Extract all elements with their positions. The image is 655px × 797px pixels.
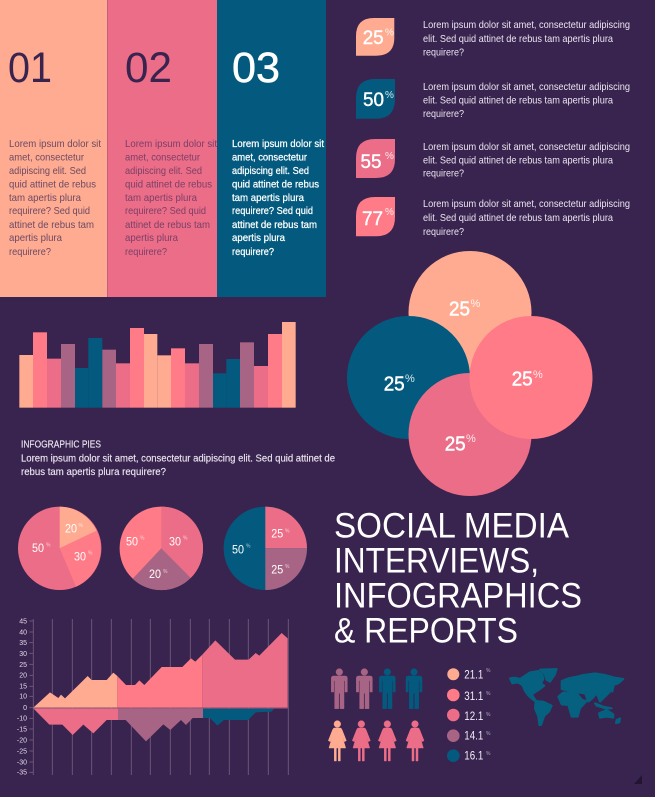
y axis labels: -25 xyxy=(17,748,27,756)
panel 01 text: adipiscing elit. Sed xyxy=(9,165,86,177)
panel 01 text: Lorem ipsum dolor sit xyxy=(9,138,101,150)
icons: women xyxy=(328,721,424,761)
panel 01 text: requirere? xyxy=(9,246,51,258)
pie chart 3: % xyxy=(246,544,251,550)
badge: 25%: 25 xyxy=(363,28,384,49)
legend: % xyxy=(486,712,491,718)
text: infographic pies: rebus tam apertis plura requirere? xyxy=(21,466,166,478)
text: item 4: requirere? xyxy=(423,226,464,238)
pie chart 3: 50 xyxy=(232,545,244,557)
y axis labels xyxy=(17,618,27,776)
pie chart 2: 50 xyxy=(126,537,138,549)
title: INTERVIEWS, xyxy=(334,542,539,580)
panel 03 text: adipiscing elit. Sed xyxy=(232,165,309,177)
panel 02 text: adipiscing elit. Sed xyxy=(125,165,202,177)
pie chart 1: 30 xyxy=(74,552,86,564)
venn circles chart: 25 xyxy=(445,434,466,456)
panel 03 text: requirere? Sed quid xyxy=(232,205,313,217)
badge: 77%: % xyxy=(385,207,394,218)
legend xyxy=(447,668,491,763)
badge: 25%: % xyxy=(385,28,394,38)
number 02: 02 xyxy=(125,44,172,92)
panel 02 text: Lorem ipsum dolor sit xyxy=(125,138,217,150)
text: item 4 xyxy=(423,198,630,238)
y axis labels: -20 xyxy=(17,738,27,744)
text: infographic pies xyxy=(21,439,335,478)
panel 03 text: requirere? xyxy=(232,246,274,258)
badge: 77% xyxy=(356,197,395,236)
legend: % xyxy=(486,751,491,757)
panel 02 text: amet, consectetur xyxy=(125,152,200,164)
number 03: 03 xyxy=(232,44,280,92)
text: item 4: Lorem ipsum dolor sit amet, consectetur adipiscing xyxy=(423,198,630,210)
pie chart 2: 20 xyxy=(149,569,161,581)
text: item 2: elit. Sed quid attinet de rebus tam apertis plura xyxy=(423,94,613,106)
venn circles chart: 25 xyxy=(449,299,470,321)
venn circles chart: 25 xyxy=(384,374,405,396)
pie chart 1: % xyxy=(78,523,84,529)
pie chart 2: % xyxy=(163,569,168,575)
badge: 25% xyxy=(356,18,394,56)
number 01: 01 xyxy=(8,44,52,92)
panel: 02 xyxy=(107,0,217,297)
panel 02 text: quid attinet de rebus xyxy=(125,178,212,190)
venn circles chart xyxy=(347,251,592,496)
y axis labels: 0 xyxy=(23,705,27,712)
text: infographic pies: INFOGRAPHIC PIES xyxy=(21,439,101,451)
legend: % xyxy=(486,691,491,697)
y axis labels: -35 xyxy=(17,770,27,776)
text: item 1: elit. Sed quid attinet de rebus tam apertis plura xyxy=(423,33,613,45)
venn circles chart: % xyxy=(405,373,415,385)
panel 01 text xyxy=(9,138,101,258)
panel 01 text: quid attinet de rebus xyxy=(9,178,96,190)
text: infographic pies: Lorem ipsum dolor sit amet, consectetur adipiscing elit. Sed quid attinet de xyxy=(21,453,335,465)
panel 02 text: attinet de rebus tam xyxy=(125,219,210,231)
text: item 2: Lorem ipsum dolor sit amet, consectetur adipiscing xyxy=(423,81,630,93)
legend: 14.1 xyxy=(464,731,483,743)
y axis labels: 40 xyxy=(19,630,27,636)
panel 01 text: apertis plura xyxy=(9,232,62,244)
pie chart 1: % xyxy=(46,542,51,548)
text: item 3: Lorem ipsum dolor sit amet, consectetur adipiscing xyxy=(423,141,630,153)
title: & REPORTS xyxy=(334,612,518,650)
text: item 1: Lorem ipsum dolor sit amet, consectetur adipiscing xyxy=(423,19,630,31)
text: item 1: requirere? xyxy=(423,46,464,58)
pie chart 2: % xyxy=(183,536,188,542)
venn circles chart: % xyxy=(466,433,476,445)
pie chart 1: % xyxy=(88,550,93,556)
pie chart 3: 25 xyxy=(271,529,283,541)
area chart xyxy=(17,618,288,776)
panel 02 text: requirere? xyxy=(125,246,167,258)
text: item 2 xyxy=(423,81,630,120)
resize handle icon xyxy=(634,775,642,784)
panel 03 text: Lorem ipsum dolor sit xyxy=(232,138,324,150)
bar chart xyxy=(19,322,296,408)
pie chart 1: 20 xyxy=(65,523,77,535)
panel 01 text: attinet de rebus tam xyxy=(9,219,94,231)
y axis labels: 20 xyxy=(19,672,27,680)
pie chart 1 xyxy=(18,507,101,590)
pie chart 3: % xyxy=(285,528,290,534)
legend: % xyxy=(486,731,491,737)
panel: 01 xyxy=(0,0,107,297)
panel 01 text: amet, consectetur xyxy=(9,152,84,164)
pie chart 2: 30 xyxy=(169,537,181,549)
badge: 55%: 55 xyxy=(360,152,382,173)
y axis labels: 35 xyxy=(19,640,27,647)
panel 03 text: attinet de rebus tam xyxy=(232,219,317,231)
title: INFOGRAPHICS xyxy=(334,576,582,616)
panel 03 text: quid attinet de rebus xyxy=(232,178,319,190)
badge: 50%: % xyxy=(385,90,394,101)
world map xyxy=(510,669,623,725)
y axis labels: 45 xyxy=(19,618,27,626)
pie chart 1: 50 xyxy=(32,543,44,555)
text: item 3 xyxy=(423,141,630,180)
text: item 3: elit. Sed quid attinet de rebus tam apertis plura xyxy=(423,154,613,166)
text: item 1 xyxy=(423,19,630,58)
y axis labels: -15 xyxy=(17,726,27,734)
badge: 50% xyxy=(356,79,395,119)
badge: 55%: % xyxy=(385,151,394,162)
panel: 03 xyxy=(217,0,326,297)
legend: 21.1 xyxy=(464,670,483,682)
panel 02 text: apertis plura xyxy=(125,232,178,244)
y axis labels: -10 xyxy=(17,716,27,722)
panel 03 text: amet, consectetur xyxy=(232,152,307,164)
pie chart 3: % xyxy=(285,564,290,570)
panel 02 text: requirere? Sed quid xyxy=(125,205,206,217)
legend: 31.1 xyxy=(464,691,483,703)
legend: 16.1 xyxy=(464,751,483,763)
badge: 77%: 77 xyxy=(362,209,383,230)
badge: 50%: 50 xyxy=(363,90,384,111)
panel 03 text: tam apertis plura xyxy=(232,192,304,204)
pie chart 2: % xyxy=(140,536,145,542)
badge: 55% xyxy=(356,139,395,178)
panel 01 text: tam apertis plura xyxy=(9,192,81,204)
title: SOCIAL MEDIA xyxy=(334,506,570,546)
icons: men xyxy=(331,669,422,709)
venn circles chart: % xyxy=(470,298,480,310)
y axis labels: -30 xyxy=(17,760,27,766)
pie chart 3: 25 xyxy=(271,565,283,577)
title xyxy=(334,506,582,650)
panel 02 text xyxy=(125,138,217,258)
legend: 12.1 xyxy=(464,711,483,723)
y axis labels: 10 xyxy=(19,694,27,700)
panel 03 text: apertis plura xyxy=(232,232,285,244)
pie chart 3 xyxy=(224,507,307,590)
panel 03 text xyxy=(232,138,324,258)
panel 02 text: tam apertis plura xyxy=(125,192,197,204)
y axis labels: 25 xyxy=(19,662,27,669)
text: item 4: elit. Sed quid attinet de rebus tam apertis plura xyxy=(423,212,613,224)
y axis labels: 15 xyxy=(19,684,27,690)
text: item 2: requirere? xyxy=(423,108,464,120)
venn circles chart: 25 xyxy=(512,369,533,391)
panel 01 text: requirere? Sed quid xyxy=(9,205,90,217)
legend: % xyxy=(486,668,491,674)
y axis labels: 30 xyxy=(19,651,27,658)
venn circles chart: % xyxy=(533,369,543,381)
text: item 3: requirere? xyxy=(423,168,464,180)
pie chart 2 xyxy=(120,507,203,590)
